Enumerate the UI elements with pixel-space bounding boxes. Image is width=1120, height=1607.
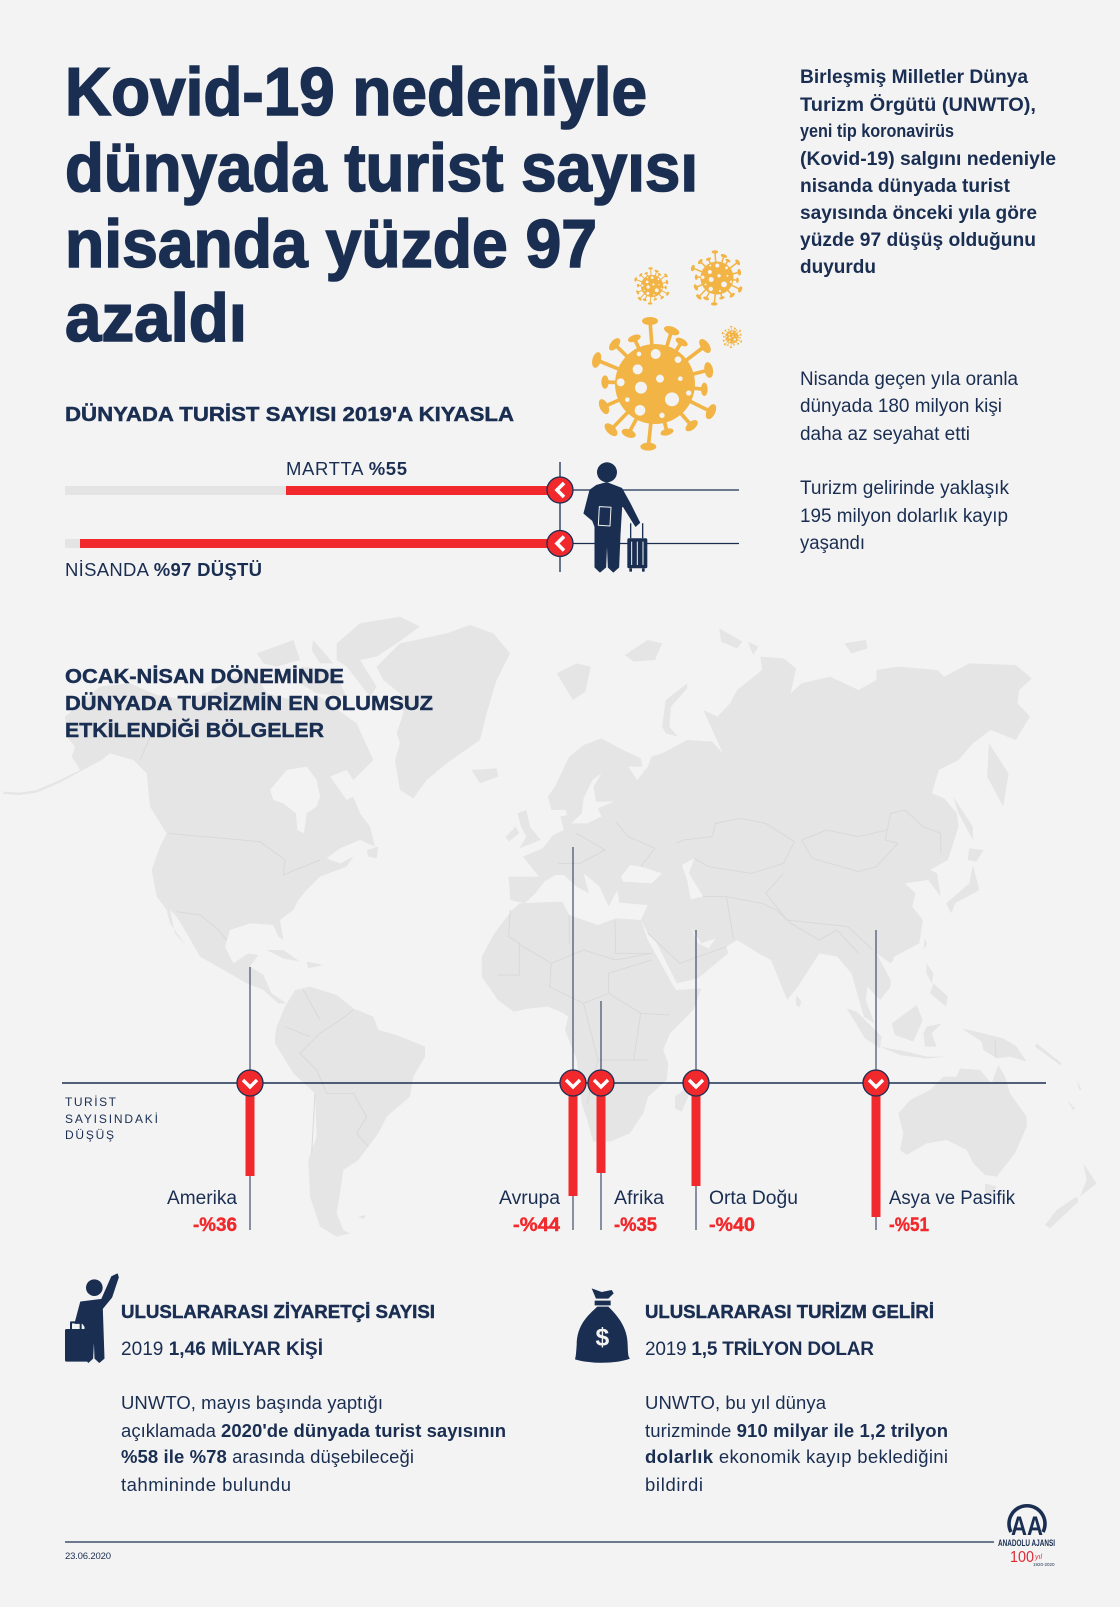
icon: money bag: $ (595, 1324, 609, 1351)
panel: international visitors: 2019 1,46 MİLYAR KİŞİ (121, 1339, 323, 1360)
region: Avrupa: -%44 (513, 1215, 560, 1236)
world map (3, 617, 1097, 1237)
logo: Anadolu Ajansı: AA (1011, 1511, 1043, 1541)
panel: international visitors (121, 1301, 506, 1495)
icon: money bag (575, 1288, 630, 1363)
footer line (65, 1541, 994, 1543)
panel: international tourism revenue: 2019 1,5 TRİLYON DOLAR (645, 1339, 874, 1360)
panel: international tourism revenue: turizminde 910 milyar ile 1,2 trilyon (645, 1420, 948, 1441)
travel decline note: dünyada 180 milyon kişi (800, 396, 1002, 417)
intro paragraph: (Kovid-19) salgını nedeniyle (800, 149, 1056, 170)
region: Amerika: Amerika (167, 1188, 237, 1209)
label: march: MARTTA %55 (286, 458, 407, 479)
panel: international tourism revenue (645, 1301, 948, 1495)
title: Kovid-19 nedeniyle (65, 54, 647, 130)
region: Avrupa (499, 847, 586, 1236)
travel decline note: Nisanda geçen yıla oranla (800, 369, 1018, 390)
panel: international tourism revenue: bildirdi (645, 1474, 703, 1495)
intro paragraph: sayısında önceki yıla göre (800, 203, 1037, 224)
intro paragraph: Turizm Örgütü (UNWTO), (800, 95, 1036, 116)
region: Orta Doğu: Orta Doğu (709, 1188, 798, 1209)
region: Amerika: -%36 (193, 1215, 237, 1236)
icon: viruses (590, 250, 743, 451)
axis label: TURİST (65, 1095, 117, 1109)
intro paragraph: nisanda dünyada turist (800, 176, 1011, 197)
region: Orta Doğu (683, 930, 798, 1236)
region: Afrika (588, 1001, 664, 1236)
logo: Anadolu Ajansı (998, 1506, 1055, 1567)
tourism revenue note (800, 478, 1009, 554)
panel: international tourism revenue: ULUSLARARASI TURİZM GELİRİ (645, 1301, 934, 1322)
date: 23.06.2020 (65, 1551, 111, 1562)
region: Asya ve Pasifik (863, 930, 1015, 1236)
intro paragraph: duyurdu (800, 257, 876, 278)
region: Asya ve Pasifik: Asya ve Pasifik (889, 1188, 1015, 1209)
panel: international visitors: tahmininde bulundu (121, 1474, 291, 1495)
axis label: DÜŞÜŞ (65, 1128, 114, 1142)
heading: most affected regions: ETKİLENDİĞİ BÖLGELER (65, 718, 324, 742)
panel: international tourism revenue: UNWTO, bu yıl dünya (645, 1392, 827, 1413)
axis label (65, 1095, 158, 1142)
title (65, 54, 698, 356)
tourism revenue note: Turizm gelirinde yaklaşık (800, 478, 1009, 499)
region: Orta Doğu: -%40 (709, 1215, 755, 1236)
logo: Anadolu Ajansı: 1920-2020 (1033, 1562, 1055, 1567)
logo: Anadolu Ajansı: yıl (1034, 1554, 1042, 1561)
panel: international visitors: %58 ile %78 arasında düşebileceği (121, 1446, 414, 1467)
travel decline note (800, 369, 1018, 445)
panel: international tourism revenue: dolarlık ekonomik kayıp beklediğini (645, 1446, 948, 1467)
region: Avrupa: Avrupa (499, 1188, 560, 1209)
chart: march and april decline bars (65, 462, 739, 572)
panel: international visitors: açıklamada 2020'de dünyada turist sayısının (121, 1420, 506, 1441)
tourism revenue note: yaşandı (800, 533, 865, 554)
heading: most affected regions (65, 665, 433, 742)
tourism revenue note: 195 milyon dolarlık kayıp (800, 506, 1008, 527)
intro paragraph (800, 67, 1056, 278)
intro paragraph: yüzde 97 düşüş olduğunu (800, 230, 1036, 251)
title: nisanda yüzde 97 (65, 206, 597, 282)
title: dünyada turist sayısı (65, 130, 698, 206)
panel: international visitors: UNWTO, mayıs başında yaptığı (121, 1392, 383, 1413)
travel decline note: daha az seyahat etti (800, 424, 970, 445)
label: april: NİSANDA %97 DÜŞTÜ (65, 559, 262, 580)
icon: traveller with suitcase (584, 462, 647, 572)
axis line (62, 1082, 1046, 1084)
region: Afrika: -%35 (614, 1215, 657, 1236)
heading: most affected regions: DÜNYADA TURİZMİN EN OLUMSUZ (65, 692, 433, 715)
logo: Anadolu Ajansı: ANADOLU AJANSI (998, 1538, 1055, 1548)
region: Asya ve Pasifik: -%51 (889, 1215, 929, 1236)
icon: waving traveller (65, 1274, 118, 1362)
region: Amerika (167, 967, 263, 1236)
title: azaldı (65, 280, 247, 356)
region: Afrika: Afrika (614, 1188, 664, 1209)
intro paragraph: Birleşmiş Milletler Dünya (800, 67, 1028, 88)
logo: Anadolu Ajansı: 100 (1010, 1549, 1034, 1566)
intro paragraph: yeni tip koronavirüs (800, 121, 954, 141)
heading: tourist numbers: DÜNYADA TURİST SAYISI 2019'A KIYASLA (65, 403, 514, 426)
heading: most affected regions: OCAK-NİSAN DÖNEMİNDE (65, 665, 344, 688)
panel: international visitors: ULUSLARARASI ZİYARETÇİ SAYISI (121, 1301, 435, 1322)
axis label: SAYISINDAKİ (65, 1112, 158, 1126)
